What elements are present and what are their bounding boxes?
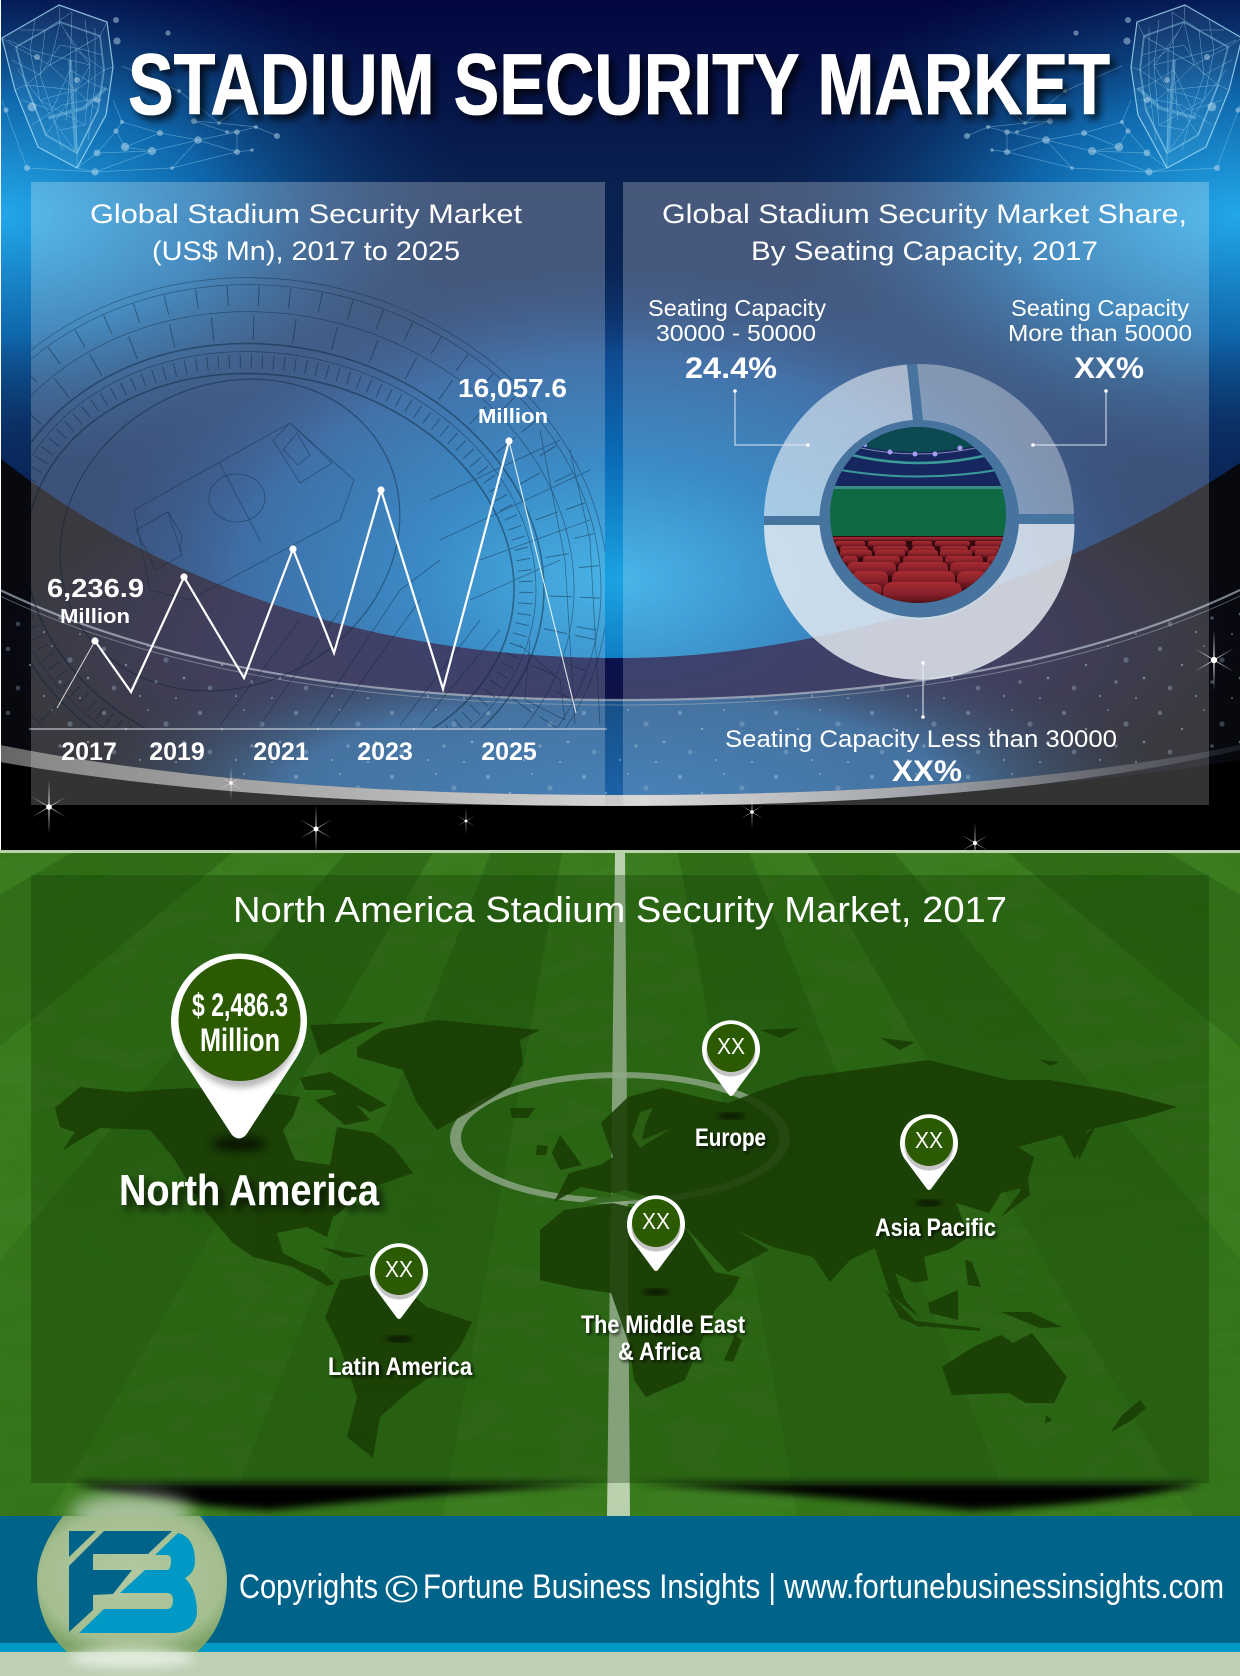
heading: right panel: By Seating Capacity, 2017: [751, 236, 1098, 266]
label: latin america: Latin America: [328, 1353, 473, 1381]
heading: left panel: [90, 199, 523, 266]
top edge of pitch: [0, 850, 1240, 853]
heading: right panel: [662, 199, 1187, 266]
panel: market share by seating capacity: [623, 182, 1209, 805]
pin: europe: XX: [717, 1033, 745, 1059]
pin: middle east and africa: XX: [642, 1208, 670, 1234]
x axis year labels: [61, 738, 537, 766]
label: seating less than 30000: XX%: [892, 755, 962, 788]
x axis year labels: 2025: [481, 738, 537, 766]
north america: [55, 1087, 413, 1286]
eurasia: [554, 1060, 1177, 1318]
panel: global market line chart: [31, 182, 605, 805]
leader line: less than 30000: [921, 661, 925, 719]
stadium seats picture: [830, 427, 1006, 604]
value label 2017: [47, 573, 144, 628]
pin: asia pacific: [900, 1114, 958, 1206]
logo: fortune business insights: [37, 1494, 227, 1668]
panel: north america market: [31, 875, 1209, 1483]
heading: left panel: Global Stadium Security Market: [90, 199, 523, 229]
label: seating less than 30000: Seating Capacity Less than 30000: [725, 726, 1117, 753]
x axis year labels: 2021: [253, 738, 309, 766]
label: middle east and africa: The Middle East: [581, 1311, 746, 1339]
hudson bay and inland seas: [572, 1108, 680, 1205]
decorative stars: [31, 629, 1234, 863]
islands: [510, 1028, 1146, 1432]
x axis year labels: 2023: [357, 738, 413, 766]
pin: north america: $ 2,486.3: [192, 987, 288, 1023]
label: middle east and africa: & Africa: [618, 1338, 702, 1366]
centre line of pitch: [607, 853, 630, 1516]
x axis year labels: 2017: [61, 738, 117, 766]
label: seating more than 50000: More than 50000: [1008, 320, 1192, 346]
label: europe: Europe: [695, 1124, 766, 1152]
section: football pitch background: [0, 853, 1240, 1516]
pin: north america: Million: [200, 1022, 280, 1058]
x axis year labels: 2019: [149, 738, 205, 766]
footer copyright text: ©: [385, 1569, 418, 1611]
footer band: [0, 1516, 1240, 1676]
value label 2025: [458, 373, 567, 428]
label: seating 30000-50000: 30000 - 50000: [656, 320, 816, 346]
pin: middle east and africa: [627, 1195, 685, 1295]
stadium blueprint drawing: [31, 277, 605, 728]
value label 2017: 6,236.9: [47, 573, 144, 603]
africa: [540, 1203, 740, 1397]
pin: latin america: XX: [385, 1256, 413, 1282]
label: asia pacific: Asia Pacific: [875, 1214, 996, 1242]
axis baseline: [31, 728, 605, 730]
label: middle east and africa: [581, 1311, 746, 1366]
ground shadow under panel: [72, 1483, 1205, 1510]
pin: latin america: [370, 1243, 428, 1342]
icon: right network shield: [964, 5, 1240, 176]
australia: [942, 1333, 1067, 1403]
pin: asia pacific: XX: [915, 1127, 943, 1153]
label: seating 30000-50000: 24.4%: [685, 352, 777, 385]
greenland: [357, 1020, 540, 1130]
heading: north america market: North America Stadium Security Market, 2017: [233, 889, 1007, 930]
label: north america: North America: [119, 1166, 379, 1215]
line chart: [57, 437, 576, 713]
world map: [55, 1020, 1177, 1458]
label: seating less than 30000: [725, 726, 1117, 788]
leader line: more than 50000: [1031, 389, 1108, 447]
segment more than 50000: [917, 364, 1074, 514]
label: seating more than 50000: XX%: [1074, 352, 1144, 385]
segment 30000-50000: [764, 364, 913, 516]
label: seating 30000-50000: [648, 295, 827, 385]
icon: left network shield: [2, 5, 280, 176]
segment less than 30000: [764, 524, 1075, 680]
heading: left panel: (US$ Mn), 2017 to 2025: [152, 236, 460, 266]
footer copyright text: Copyrights: [239, 1568, 378, 1606]
south america: [325, 1275, 472, 1458]
value label 2025: Million: [478, 406, 548, 428]
pin: europe: [702, 1020, 760, 1119]
value label 2025: 16,057.6: [458, 373, 567, 403]
donut chart: [764, 364, 1075, 680]
heading: right panel: Global Stadium Security Market Share,: [662, 199, 1187, 229]
value label 2017: Million: [60, 606, 130, 628]
centre circle of pitch: [450, 1072, 790, 1204]
label: seating more than 50000: [1008, 295, 1192, 385]
label: seating 30000-50000: Seating Capacity: [648, 295, 827, 321]
pin: north america: [171, 954, 307, 1151]
leader line: 30000-50000: [733, 389, 810, 447]
arctic islands: [300, 1022, 387, 1258]
label: seating more than 50000: Seating Capacity: [1011, 295, 1190, 321]
